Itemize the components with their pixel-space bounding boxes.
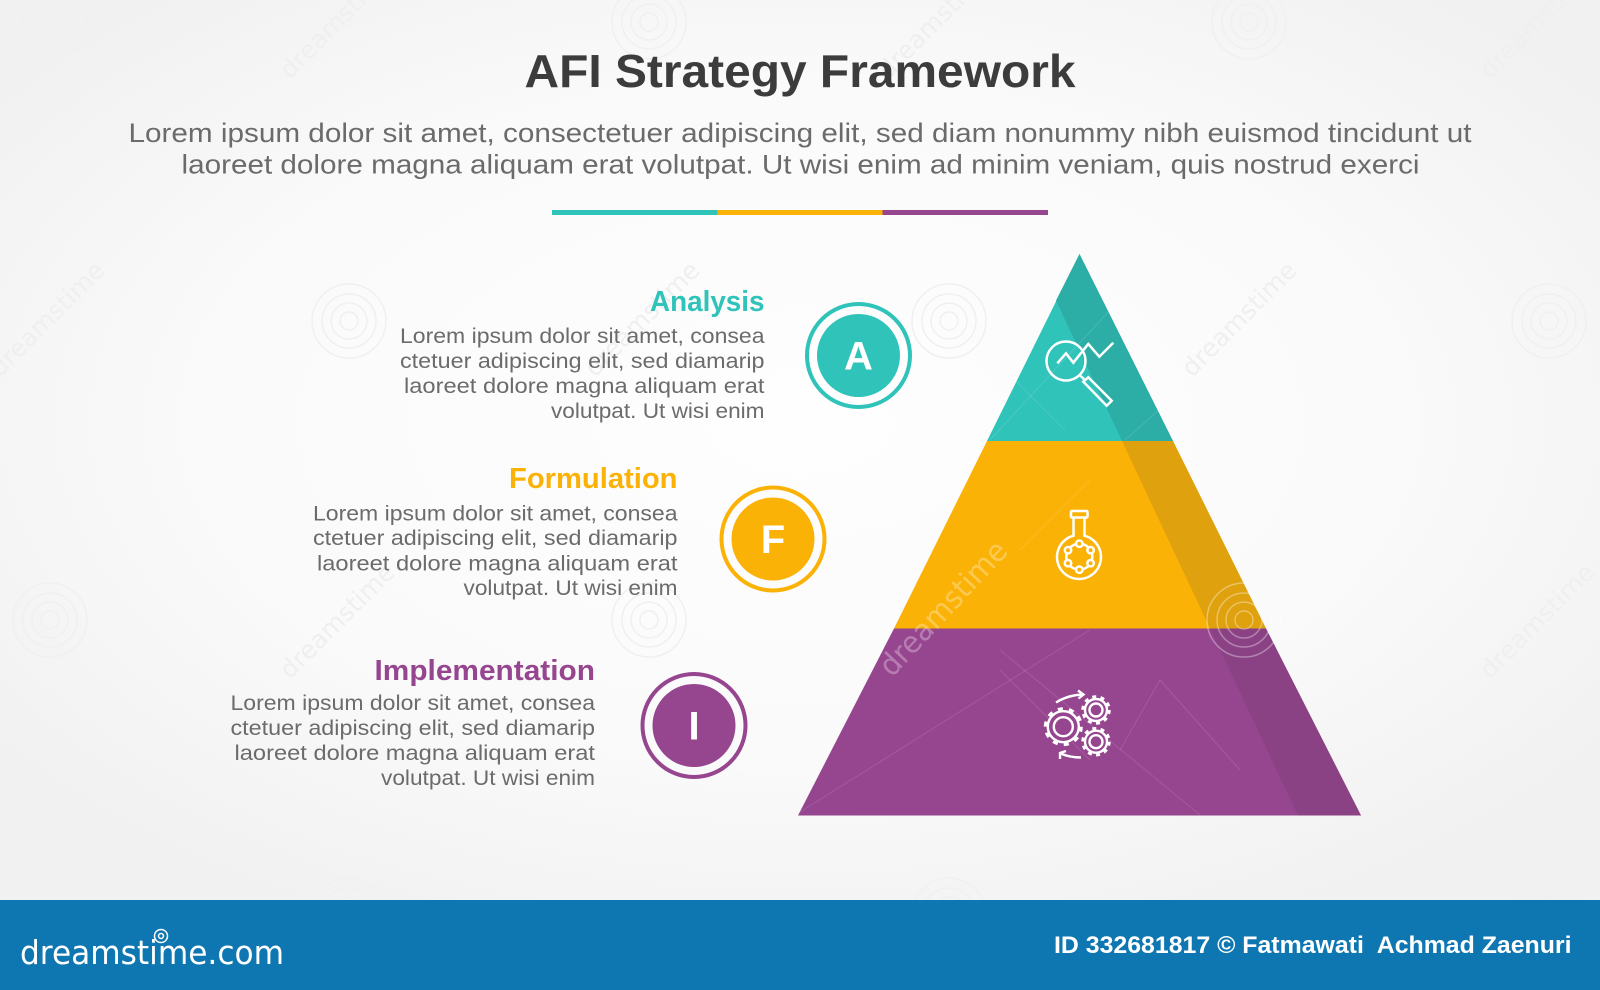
text block: formulation: ctetuer adipiscing elit, sed diamarip <box>313 526 678 550</box>
text block: analysis: volutpat. Ut wisi enim <box>551 399 764 423</box>
heading: analysis: Analysis <box>650 286 764 318</box>
watermark over pyramid <box>800 310 1281 815</box>
badge: A <box>807 304 910 407</box>
badge: I <box>642 674 746 777</box>
watermark pattern on background: dreamstime <box>579 256 705 382</box>
pyramid tier: implementation <box>798 628 1361 816</box>
text block: analysis <box>400 324 765 423</box>
text block: formulation: Lorem ipsum dolor sit amet, consea <box>313 502 678 526</box>
pyramid tier: formulation <box>894 441 1266 628</box>
watermark over pyramid: dreamstime <box>872 534 1015 683</box>
text block: analysis: Lorem ipsum dolor sit amet, consea <box>400 324 765 348</box>
pyramid chart <box>798 254 1361 816</box>
section: formulation <box>313 463 824 600</box>
footer bar <box>0 900 1600 990</box>
text block: implementation: Lorem ipsum dolor sit amet, consea <box>230 691 595 715</box>
badge: F: F <box>761 518 785 562</box>
watermark pattern on background: dreamstime <box>1474 558 1600 684</box>
text block: implementation <box>230 691 595 790</box>
footer logo: dreamstime.com <box>20 933 284 972</box>
badge: F <box>722 488 824 590</box>
icon: flask with molecule <box>1057 511 1101 579</box>
subtitle <box>128 118 1472 180</box>
subtitle: laoreet dolore magna aliquam erat volutpat. Ut wisi enim ad minim veniam, quis nostrud exerci <box>182 150 1420 180</box>
section: implementation <box>230 655 746 790</box>
text block: implementation: ctetuer adipiscing elit, sed diamarip <box>230 716 595 740</box>
text block: formulation <box>313 502 678 600</box>
heading: implementation: Implementation <box>374 655 595 687</box>
badge: I: I <box>688 704 700 748</box>
text block: analysis: ctetuer adipiscing elit, sed diamarip <box>400 349 765 373</box>
badge: A: A <box>844 334 873 378</box>
text block: implementation: volutpat. Ut wisi enim <box>381 766 595 790</box>
text block: formulation: laoreet dolore magna aliquam erat <box>317 552 678 576</box>
icon: gears with arrows <box>1046 690 1109 759</box>
footer credit: ID 332681817 © Fatmawati Achmad Zaenuri <box>1054 932 1572 959</box>
watermark pattern on background: dreamstime <box>1176 256 1302 382</box>
heading: formulation: Formulation <box>509 463 678 495</box>
title: AFI Strategy Framework <box>524 45 1076 97</box>
tricolor divider <box>552 210 1048 215</box>
text block: implementation: laoreet dolore magna aliquam erat <box>234 741 595 765</box>
section: analysis <box>400 286 910 423</box>
icon: magnifier with chart <box>1046 342 1113 406</box>
text block: analysis: laoreet dolore magna aliquam erat <box>404 374 765 398</box>
pyramid tier: analysis <box>987 254 1173 441</box>
text block: formulation: volutpat. Ut wisi enim <box>464 576 678 600</box>
watermark pattern on background: dreamstime <box>274 558 400 684</box>
subtitle: Lorem ipsum dolor sit amet, consectetuer adipiscing elit, sed diam nonummy nibh euismod tincidunt ut <box>128 118 1472 148</box>
